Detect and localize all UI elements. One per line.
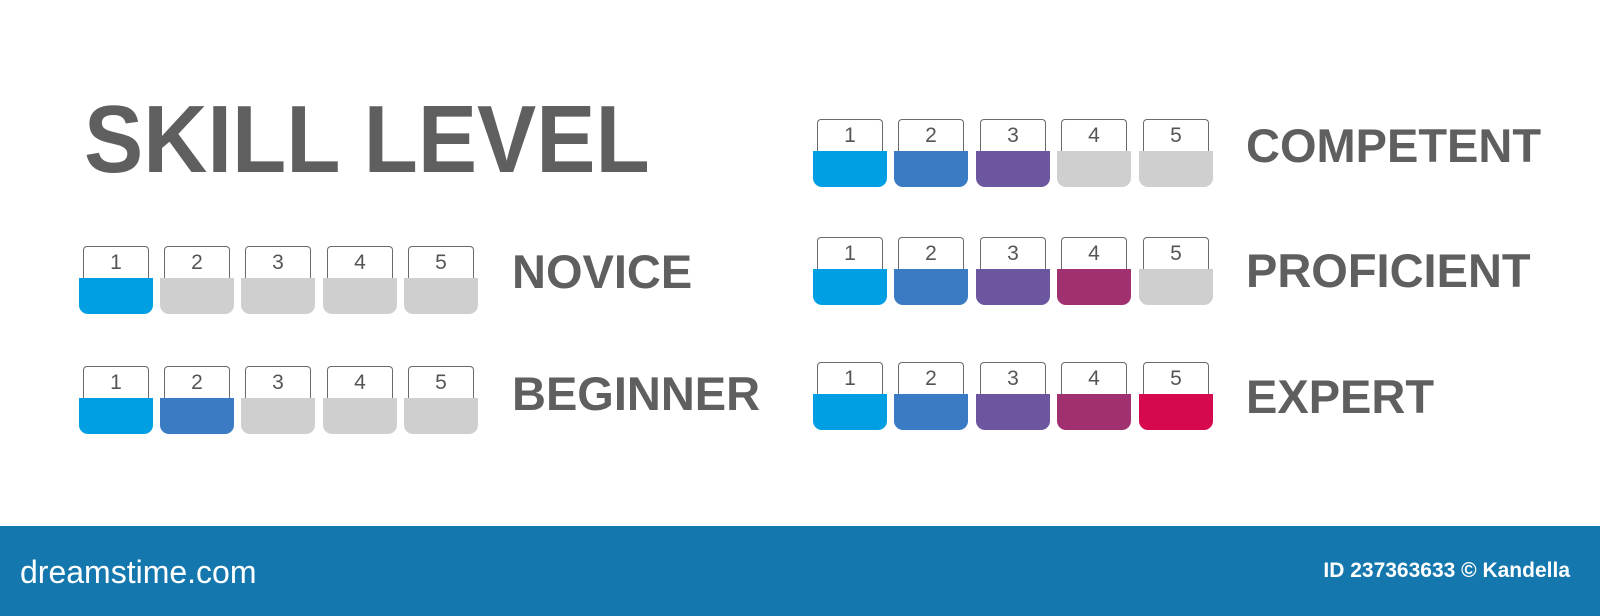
row: novice: 4 [354,251,366,274]
row: beginner: 4 [354,371,366,394]
row: proficient: 4 [1088,242,1100,265]
row: beginner: 3 [272,371,284,394]
label: expert: EXPERT [1246,370,1434,423]
row: expert: 5 [1170,367,1182,390]
row: proficient: 5 [1170,242,1182,265]
row: novice [79,246,478,314]
row: novice: 5 [435,251,447,274]
row: proficient: 3 [1007,242,1019,265]
row: competent: 2 [925,124,937,147]
row: beginner: 2 [191,371,203,394]
row: expert: 2 [925,367,937,390]
label: proficient: PROFICIENT [1246,244,1531,297]
row: expert: 4 [1088,367,1100,390]
row: novice: 2 [191,251,203,274]
label: competent: COMPETENT [1246,119,1541,172]
row: beginner [79,366,478,434]
title: SKILL LEVEL [84,86,650,193]
row: proficient [813,237,1213,305]
row: competent: 1 [844,124,856,147]
row: competent [813,119,1213,187]
row: beginner: 5 [435,371,447,394]
label: beginner: BEGINNER [512,367,760,420]
row: novice: 3 [272,251,284,274]
row: proficient: 1 [844,242,856,265]
row: proficient: 2 [925,242,937,265]
footer bar [0,526,1600,616]
label: novice: NOVICE [512,245,692,298]
row: expert: 1 [844,367,856,390]
row: beginner: 1 [110,371,122,394]
row: competent: 5 [1170,124,1182,147]
row: expert [813,362,1213,430]
row: novice: 1 [110,251,122,274]
footer logo text: dreamstime.com [20,554,256,590]
row: competent: 4 [1088,124,1100,147]
row: competent: 3 [1007,124,1019,147]
row: expert: 3 [1007,367,1019,390]
footer id text: ID 237363633 © Kandella [1323,559,1570,582]
